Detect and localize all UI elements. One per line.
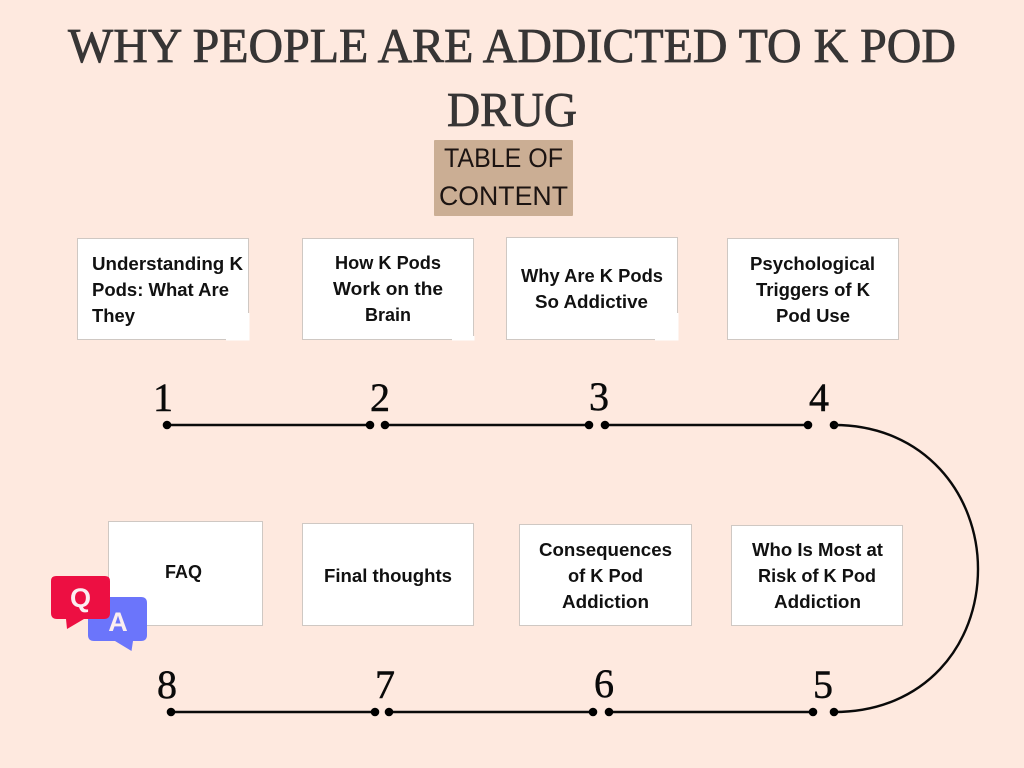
card 5: Who Is Most at [752, 540, 883, 560]
card 3: Why Are K Pods [521, 266, 663, 286]
step numbers bottom row: 8 [157, 662, 177, 707]
card 3: So Addictive [535, 292, 648, 312]
step numbers top row: 4 [809, 375, 829, 420]
step numbers top row: 2 [370, 375, 390, 420]
timeline top row [163, 421, 838, 429]
card 4: Psychological [750, 254, 875, 274]
card 6: Addiction [562, 592, 649, 612]
card 2: How K Pods [335, 253, 441, 273]
card 4: Triggers of K [756, 280, 870, 300]
timeline bottom row [167, 708, 838, 716]
card 1: Understanding K [92, 254, 243, 274]
step numbers top row [153, 374, 829, 420]
card 3 [506, 238, 678, 340]
card 8: FAQ [108, 522, 262, 626]
card 7 [302, 524, 474, 626]
icon: Q and A speech bubbles: A [108, 607, 128, 637]
card 2: Brain [365, 305, 411, 325]
card 4: Pod Use [776, 306, 850, 326]
card 6: of K Pod [568, 566, 643, 586]
step numbers bottom row: 6 [594, 661, 614, 706]
step numbers top row: 3 [589, 374, 609, 419]
title [68, 18, 956, 137]
card 8: FAQ: FAQ [165, 562, 202, 582]
table of content label [434, 140, 573, 216]
card 5 [732, 526, 902, 626]
card 5: Addiction [774, 592, 861, 612]
table of content label: CONTENT [439, 181, 568, 211]
step numbers bottom row [157, 661, 833, 707]
icon: Q and A speech bubbles: Q [70, 583, 91, 613]
card 6 [520, 524, 692, 626]
table of content label: TABLE OF [444, 143, 563, 173]
card 6: Consequences [539, 540, 672, 560]
curved connector from 4 to 5 [834, 425, 978, 712]
card 4 [728, 238, 898, 340]
card 2 [302, 238, 474, 340]
step numbers bottom row: 7 [375, 662, 395, 707]
step numbers bottom row: 5 [813, 662, 833, 707]
title: WHY PEOPLE ARE ADDICTED TO K POD [68, 18, 956, 73]
icon: Q and A speech bubbles [51, 576, 147, 651]
title: DRUG [447, 82, 577, 137]
card 5: Risk of K Pod [758, 566, 876, 586]
card 1: Pods: What Are [92, 280, 229, 300]
card 1 [78, 238, 250, 340]
card 2: Work on the [333, 279, 443, 299]
card 7: Final thoughts [324, 566, 452, 586]
card 1: They [92, 306, 135, 326]
step numbers top row: 1 [153, 375, 173, 420]
